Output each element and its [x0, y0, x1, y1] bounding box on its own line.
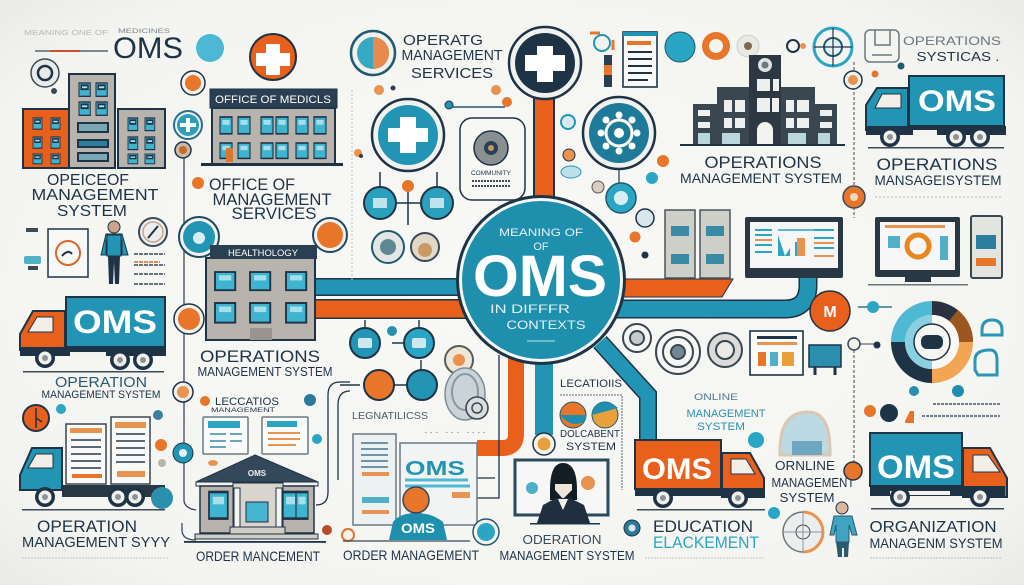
panel: healthology building: [174, 217, 347, 379]
icon: tan badge: [445, 346, 473, 374]
icon: systems diagram: [865, 30, 899, 62]
panel: left document truck: [20, 404, 173, 558]
panel: organization truck: [864, 385, 1007, 558]
text: operations management system: [198, 347, 332, 379]
text: online management system: MANAGEMENT: [686, 408, 766, 420]
icon: teal dots: [56, 404, 167, 467]
document panel: [353, 434, 396, 525]
text: office of management services: [209, 175, 332, 223]
text: contexts: CONTEXTS: [506, 318, 586, 332]
icon: gauge: [139, 218, 167, 246]
panel: education truck: [635, 440, 765, 558]
text: operation management syyy: OPERATION: [37, 517, 137, 536]
card caption: COMMUNITY: [471, 171, 511, 177]
illustration: teal truck: [870, 433, 1007, 510]
text: online management system: [686, 392, 766, 433]
panel: gear and doc cluster (top right of centre): [561, 32, 669, 258]
text: education system: DOLCABENT: [560, 429, 620, 440]
small label: MEDICINES: [118, 29, 170, 35]
text lines: [134, 254, 165, 284]
doc panel: [750, 331, 803, 375]
icon: small cluster: [24, 228, 41, 270]
monitor: analytics: [745, 217, 843, 278]
icon: orange node on teal band: [533, 433, 555, 455]
icon: teal dot: [748, 432, 764, 448]
icon: link nodes: [354, 85, 512, 158]
icon: gauge dome: [780, 412, 830, 455]
monitor: donut dashboard: [868, 217, 968, 286]
text: operations management system: [680, 153, 842, 186]
text: operations management system: MANAGEMENT SYSTEM: [198, 364, 332, 379]
screen panel: [400, 443, 477, 525]
screen title: OMS: [405, 458, 465, 480]
text: lecations: LECATIOIIS: [560, 378, 622, 390]
icon: pale blue badge: [196, 34, 224, 62]
text: operation management system: OPERATION: [55, 374, 147, 391]
card: camera: [460, 118, 525, 200]
text: locations management: LECCATIOS: [215, 396, 279, 408]
illustration: office buildings: [23, 74, 165, 168]
connector bands around the central circle: [182, 62, 854, 540]
status dots and rows: [864, 385, 1000, 423]
illustration: teal truck: [866, 76, 1006, 148]
text: office of management system: SYSTEM: [57, 203, 127, 220]
icon: node on line: [843, 186, 865, 208]
text: office of management system: MANAGEMENT: [32, 187, 159, 204]
truck label: OMS: [642, 453, 712, 486]
icon: gear circle: [583, 97, 655, 169]
text: management system: MANAGENM SYSTEM: [870, 535, 1002, 551]
heading: OMS: OMS: [473, 244, 607, 309]
small dots: [200, 394, 332, 535]
text: operations management system: MANSAGEISYSTEM: [874, 172, 1002, 188]
icon: small ring: [624, 520, 640, 536]
panel: office of management system (top left): [23, 29, 183, 284]
illustration: building: [206, 245, 317, 340]
icon: timer: [23, 405, 49, 431]
truck label: OMS: [918, 85, 996, 118]
label: small top line: MEANING ONE OF: [24, 30, 108, 37]
icon: small link node: [175, 142, 191, 158]
text: operating management services: SERVICES: [411, 65, 493, 82]
mini monitor: [809, 345, 841, 375]
chart: two pies: [560, 402, 618, 428]
node on left wire: [173, 382, 193, 463]
text: eleackement: ELACKEMENT: [653, 533, 759, 552]
icon text: M: [823, 304, 837, 321]
panel: operations management system (school building): [665, 28, 865, 208]
small dots: [872, 62, 1002, 197]
icon: clipboard: [48, 229, 88, 277]
text: operations management system: OPERATIONS: [704, 153, 822, 172]
text: locations management: MANAGEMENT: [211, 408, 275, 414]
icon: orange dot: [192, 177, 204, 189]
text: office of management services: SERVICES: [232, 204, 316, 223]
illustration: document truck: [20, 417, 173, 510]
icon: orange node: [844, 71, 862, 89]
faint caption: ··· ··· ····: [423, 430, 487, 436]
text: operation management system: [42, 374, 160, 401]
text: office of management system: [32, 172, 159, 220]
badge text: OMS: [401, 520, 435, 536]
panel: logistics node cluster: [340, 320, 488, 436]
panel: right truck and operations systems: [865, 30, 1006, 197]
text: education system: [560, 429, 620, 453]
text: operation management syyy: MANAGEMENT SYYY: [22, 534, 170, 551]
icon: left orange ring: [342, 529, 470, 541]
text: organization: ORGANIZATION: [870, 519, 996, 536]
text: operations management system: OPERATIONS: [876, 155, 998, 174]
illustration: office of medicis building: [201, 89, 343, 166]
divider: [527, 340, 555, 342]
panel: bank with location cards: [173, 382, 332, 564]
icon: orange badge: [313, 218, 347, 252]
icon: orange node: [844, 462, 862, 480]
icon: orange medical cross: [250, 34, 296, 80]
text: online management system: ONLINE: [694, 392, 738, 402]
text: education: EDUCATION: [653, 517, 753, 536]
icon: teal dot: [768, 507, 780, 519]
icon: globe badge: [351, 31, 395, 75]
text: operations systems: OPERATIONS: [903, 34, 1001, 48]
truck label: OMS: [877, 449, 955, 485]
icon: document: [623, 32, 657, 87]
illustration: bank building: [184, 455, 326, 543]
server panels: [665, 210, 730, 278]
icon: small emblems: [561, 33, 669, 258]
icon: node tree: [364, 172, 453, 225]
icon: round badge: [473, 519, 499, 545]
text: operations management system: OPERATIONS: [200, 347, 320, 366]
text: meaning of: MEANING OF: [499, 227, 583, 239]
icon: spiral seal: [31, 51, 108, 94]
card: orange list: [262, 417, 308, 454]
text: locations management: [211, 396, 279, 414]
text: ornline management system: ORNLINE: [775, 458, 835, 473]
icon: orange node: [174, 304, 204, 334]
text: order management: ORDER MANCEMENT: [196, 548, 320, 564]
dotted rule: [560, 395, 622, 490]
truck label: OMS: [73, 304, 157, 340]
text: operating management services: [402, 32, 502, 82]
sign text: OFFICE OF MEDICLS: [215, 94, 331, 106]
illustration: monitor with woman: [515, 460, 608, 524]
panel: dashboards row: [665, 210, 1002, 383]
text: operation management system: [500, 532, 634, 563]
illustration: orange cab truck: [20, 297, 166, 372]
heading: OMS: OMS: [113, 32, 183, 65]
icon: pin link: [858, 301, 892, 313]
illustration: campus building: [680, 55, 845, 146]
chart: donut: [891, 301, 973, 383]
text: online management system: SYSTEM: [697, 421, 745, 433]
sign text: HEALTHOLOGY: [228, 248, 298, 258]
panel: operating management services (top centre): [351, 27, 581, 263]
panel: central OMS circle: [456, 195, 626, 365]
node network: [340, 320, 437, 400]
text: education system: SYSTEM: [566, 441, 616, 453]
card: list: [203, 417, 248, 454]
text: operation management system: MANAGEMENT SYSTEM: [500, 548, 634, 563]
icon: dark cross circle: [509, 27, 581, 99]
text: ornline management system: SYSTEM: [780, 490, 834, 505]
text: operating management services: OPERATG: [403, 32, 483, 49]
text: operations management system: MANAGEMENT SYSTEM: [680, 170, 842, 186]
icon: phone: [971, 216, 1002, 278]
text: in different: IN DIFFFR: [490, 302, 570, 316]
icon: teal cross circle: [372, 99, 444, 171]
icon: small node: [848, 338, 880, 350]
panel: office of management services: [174, 34, 343, 223]
icon: two lens badges: [372, 231, 439, 263]
text: operation management syyy: [22, 517, 170, 551]
text: office of management services: MANAGEMENT: [212, 190, 332, 209]
icon: orange M circle: [810, 291, 850, 331]
text: of: OF: [533, 241, 549, 253]
icons: top row badges: [665, 28, 852, 66]
text: operation management system: ODERATION: [522, 532, 602, 547]
panel: education cluster: [500, 378, 640, 563]
icon: blue cross circle: [174, 111, 202, 139]
text: office of management services: OFFICE OF: [209, 175, 295, 194]
icon: radar target: [783, 512, 823, 552]
text: operations systems: SYSTICAS .: [916, 49, 1000, 64]
text: operations management system: [874, 155, 1002, 188]
caption lines: [472, 181, 510, 186]
person with OMS badge: [389, 487, 447, 540]
icon: manager figure: [101, 221, 128, 284]
text: ornline management system: MANAGEMENT: [772, 475, 855, 490]
text: operating management services: MANAGEMENT: [402, 47, 502, 64]
roof label: OMS: [248, 469, 267, 478]
icon: orange target: [181, 71, 205, 95]
panel: online management: [623, 324, 880, 557]
text: ornline management system: [772, 458, 855, 505]
text: operation management system: MANAGEMENT SYSTEM: [42, 389, 160, 401]
icon: worker figure: [830, 502, 857, 557]
panel: left orange truck: [20, 297, 166, 401]
icons: concentric rings: [623, 324, 742, 374]
text: order management: ORDER MANAGEMENT: [343, 547, 479, 563]
text: legnatilicss: LEGNATILICSS: [352, 411, 428, 422]
icon: devices beside donut: [975, 320, 1002, 375]
icon: chat badge: [179, 217, 219, 257]
icon: teal ring below gear: [606, 170, 636, 213]
text: operations systems: [903, 34, 1001, 64]
icon: fingerprint: [445, 368, 488, 420]
panel: order management screens: [342, 434, 499, 563]
text: office of management system: OPEICEOF: [47, 172, 129, 189]
